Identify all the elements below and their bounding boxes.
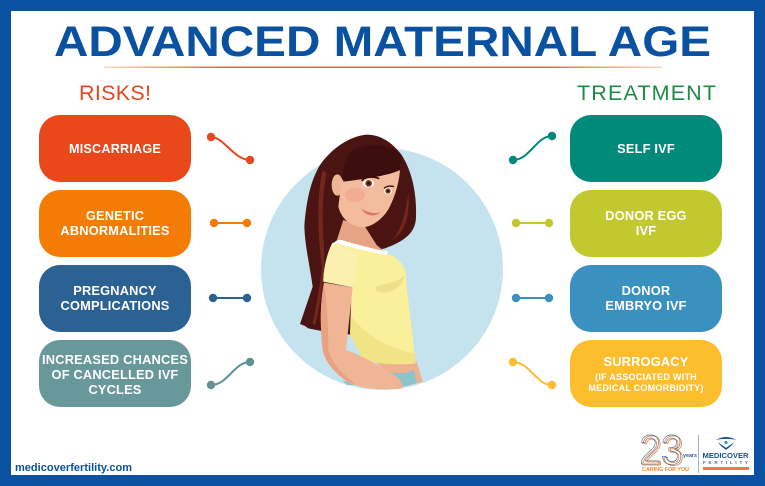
treatment: surrogacy: (IF ASSOCIATED WITH [595,372,697,382]
face [338,170,400,227]
logo divider [698,435,699,473]
eyes [362,177,394,194]
logo: 23 years caring for you: 23 [640,426,682,473]
shirt [323,243,415,364]
cheek [345,188,365,202]
risk: miscarriage [39,115,191,182]
website address: medicoverfertility.com [15,462,132,474]
risk: cancelled IVF cycles: INCREASED CHANCES [42,352,188,367]
risk: genetic abnormalities [39,190,191,257]
hair [300,135,416,335]
logo: 23 years caring for you: CARING FOR YOU [642,467,689,473]
ear [332,174,343,196]
connector: pregnancy complications [210,295,250,301]
central circle background [261,148,503,390]
connector: donor egg [513,220,552,226]
treatment: surrogacy: SURROGACY [604,354,689,369]
connector: donor embryo [513,295,552,301]
treatment: surrogacy [570,340,722,407]
treatment: donor egg IVF [570,190,722,257]
connector: genetic abnormalities [211,220,250,226]
risk: pregnancy complications [39,265,191,332]
logo: 23 years caring for you: years [683,453,697,459]
neck [337,220,387,253]
risk: cancelled IVF cycles [39,340,191,407]
risk: genetic abnormalities: GENETIC [86,208,144,223]
heading: risks: RISKS! [79,81,151,105]
waist and jeans [375,362,423,387]
treatment: self IVF [570,115,722,182]
risk: genetic abnormalities: ABNORMALITIES [60,223,170,238]
illustration: woman [300,135,423,389]
fringe [343,145,402,182]
treatment: donor egg IVF: IVF [636,223,656,238]
risk: pregnancy complications: PREGNANCY [73,283,157,298]
treatment: donor embryo IVF: DONOR [622,283,670,298]
risk: cancelled IVF cycles: CYCLES [88,382,142,397]
risk: pregnancy complications: COMPLICATIONS [60,298,170,313]
logo: 23 years caring for you: 23 [641,427,684,474]
connector: cancelled cycles [208,359,253,388]
connector: miscarriage [208,134,253,163]
collar [331,240,388,255]
logo: medicover fertility: FERTILITY [703,460,748,465]
logo: medicover fertility [702,437,749,470]
arm [321,283,403,389]
treatment: self IVF: SELF IVF [617,141,675,156]
title underline [104,66,662,68]
treatment: surrogacy: MEDICAL COMORBIDITY) [588,383,704,393]
risk: miscarriage: MISCARRIAGE [69,141,161,156]
connector: surrogacy [510,359,555,388]
title: ADVANCED MATERNAL AGE [54,18,711,66]
treatment: donor embryo IVF: EMBRYO IVF [605,298,687,313]
treatment: donor egg IVF: DONOR EGG [605,208,687,223]
mouth [361,209,381,215]
treatment: donor embryo IVF [570,265,722,332]
risk: cancelled IVF cycles: OF CANCELLED IVF [52,367,178,382]
heading: treatment: TREATMENT [577,81,716,105]
connector: self IVF [510,133,555,163]
logo: medicover fertility: MEDICOVER [702,453,748,460]
